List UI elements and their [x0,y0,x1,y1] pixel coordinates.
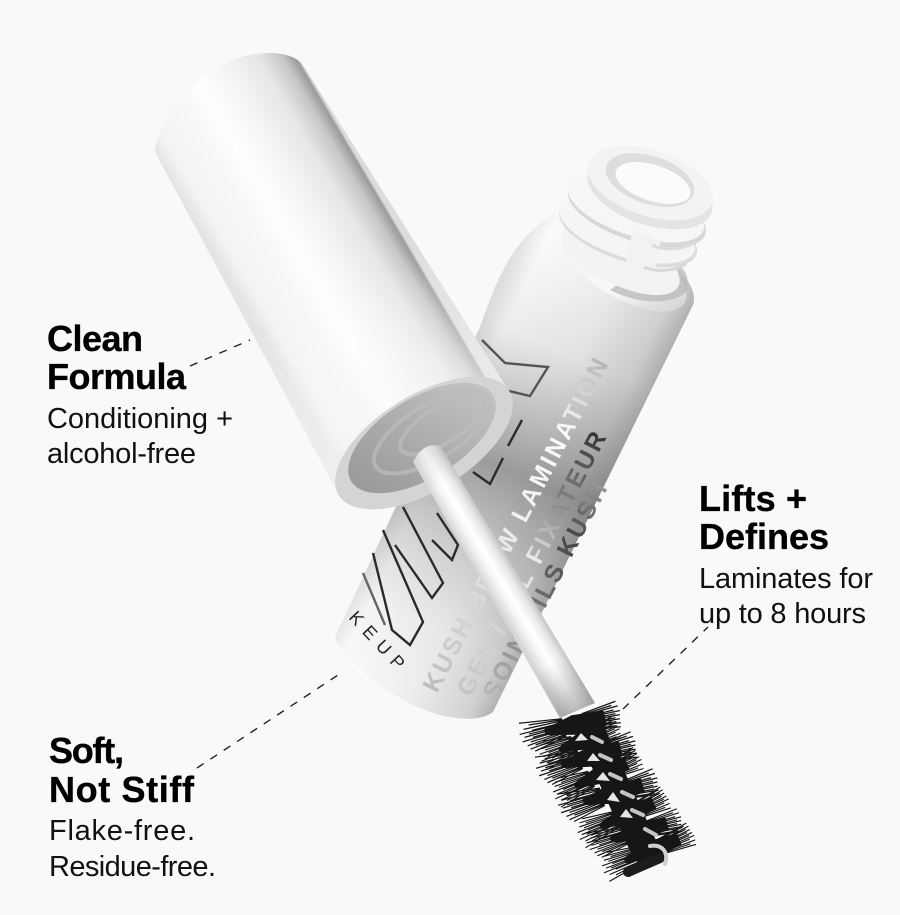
callout: lifts and defines: up to 8 hours [699,598,866,630]
callout: soft not stiff: Residue-free. [49,851,216,883]
callout: clean formula: Conditioning + [47,403,233,435]
lower collar ring [552,206,690,310]
callout: clean formula [47,318,233,470]
cap body [155,53,509,495]
white bristle gaps [575,733,633,818]
callout: lifts and defines: Laminates for [699,563,873,595]
neck channel [624,230,661,280]
cap inner threads [362,374,502,490]
dashed leader: lifts and defines [623,627,708,709]
callout: soft not stiff: Soft, [49,730,124,771]
collar shadow [610,268,688,302]
cap rim [314,350,534,536]
shoulder collar [548,207,700,329]
callout: lifts and defines: Defines [699,516,829,557]
bottle body [335,215,694,719]
callout: clean formula: Clean [47,318,143,359]
opening outer [599,143,701,217]
upper thread [560,162,714,262]
callout: soft not stiff: Flake-free. [49,815,195,847]
cap [155,53,534,536]
wand shading [413,445,595,718]
lower thread [551,182,705,282]
product name text: SOIN CILS KUSH [477,478,613,704]
wire end [628,858,660,872]
callout: lifts and defines: Lifts + [699,478,807,519]
brush [517,699,698,882]
callout: lifts and defines [699,478,873,630]
callout: clean formula: alcohol-free [47,438,196,470]
bottle neck and threads [548,132,722,329]
bottle shading [335,215,694,719]
thread notch right [652,243,695,249]
logo outlines [363,340,548,645]
callout: soft not stiff: Not Stiff [49,769,195,810]
rope wire [592,737,656,835]
bottle [335,132,722,719]
logo wordmark: KEUP [345,607,409,673]
top ring side [578,141,722,243]
product name text: KUSH BROW LAMINATION [417,354,614,697]
opening inner [610,154,696,212]
dashed leader: clean formula [190,340,250,366]
dashed leader: soft not stiff [197,675,338,768]
bristle tufts [517,699,698,882]
top ring face [578,132,722,234]
callout: soft not stiff [49,730,216,883]
wand [413,445,595,718]
thread notch lower [644,264,686,270]
product name text: GEL / CIL FIXATEUR [451,427,612,701]
callout: clean formula: Formula [47,356,187,397]
wire tip highlight [650,846,666,864]
twisted wire core highlights [575,733,656,835]
cap inside [330,361,514,515]
cap lower glow [155,53,509,495]
wand stem [413,445,595,718]
brush core [592,734,645,850]
